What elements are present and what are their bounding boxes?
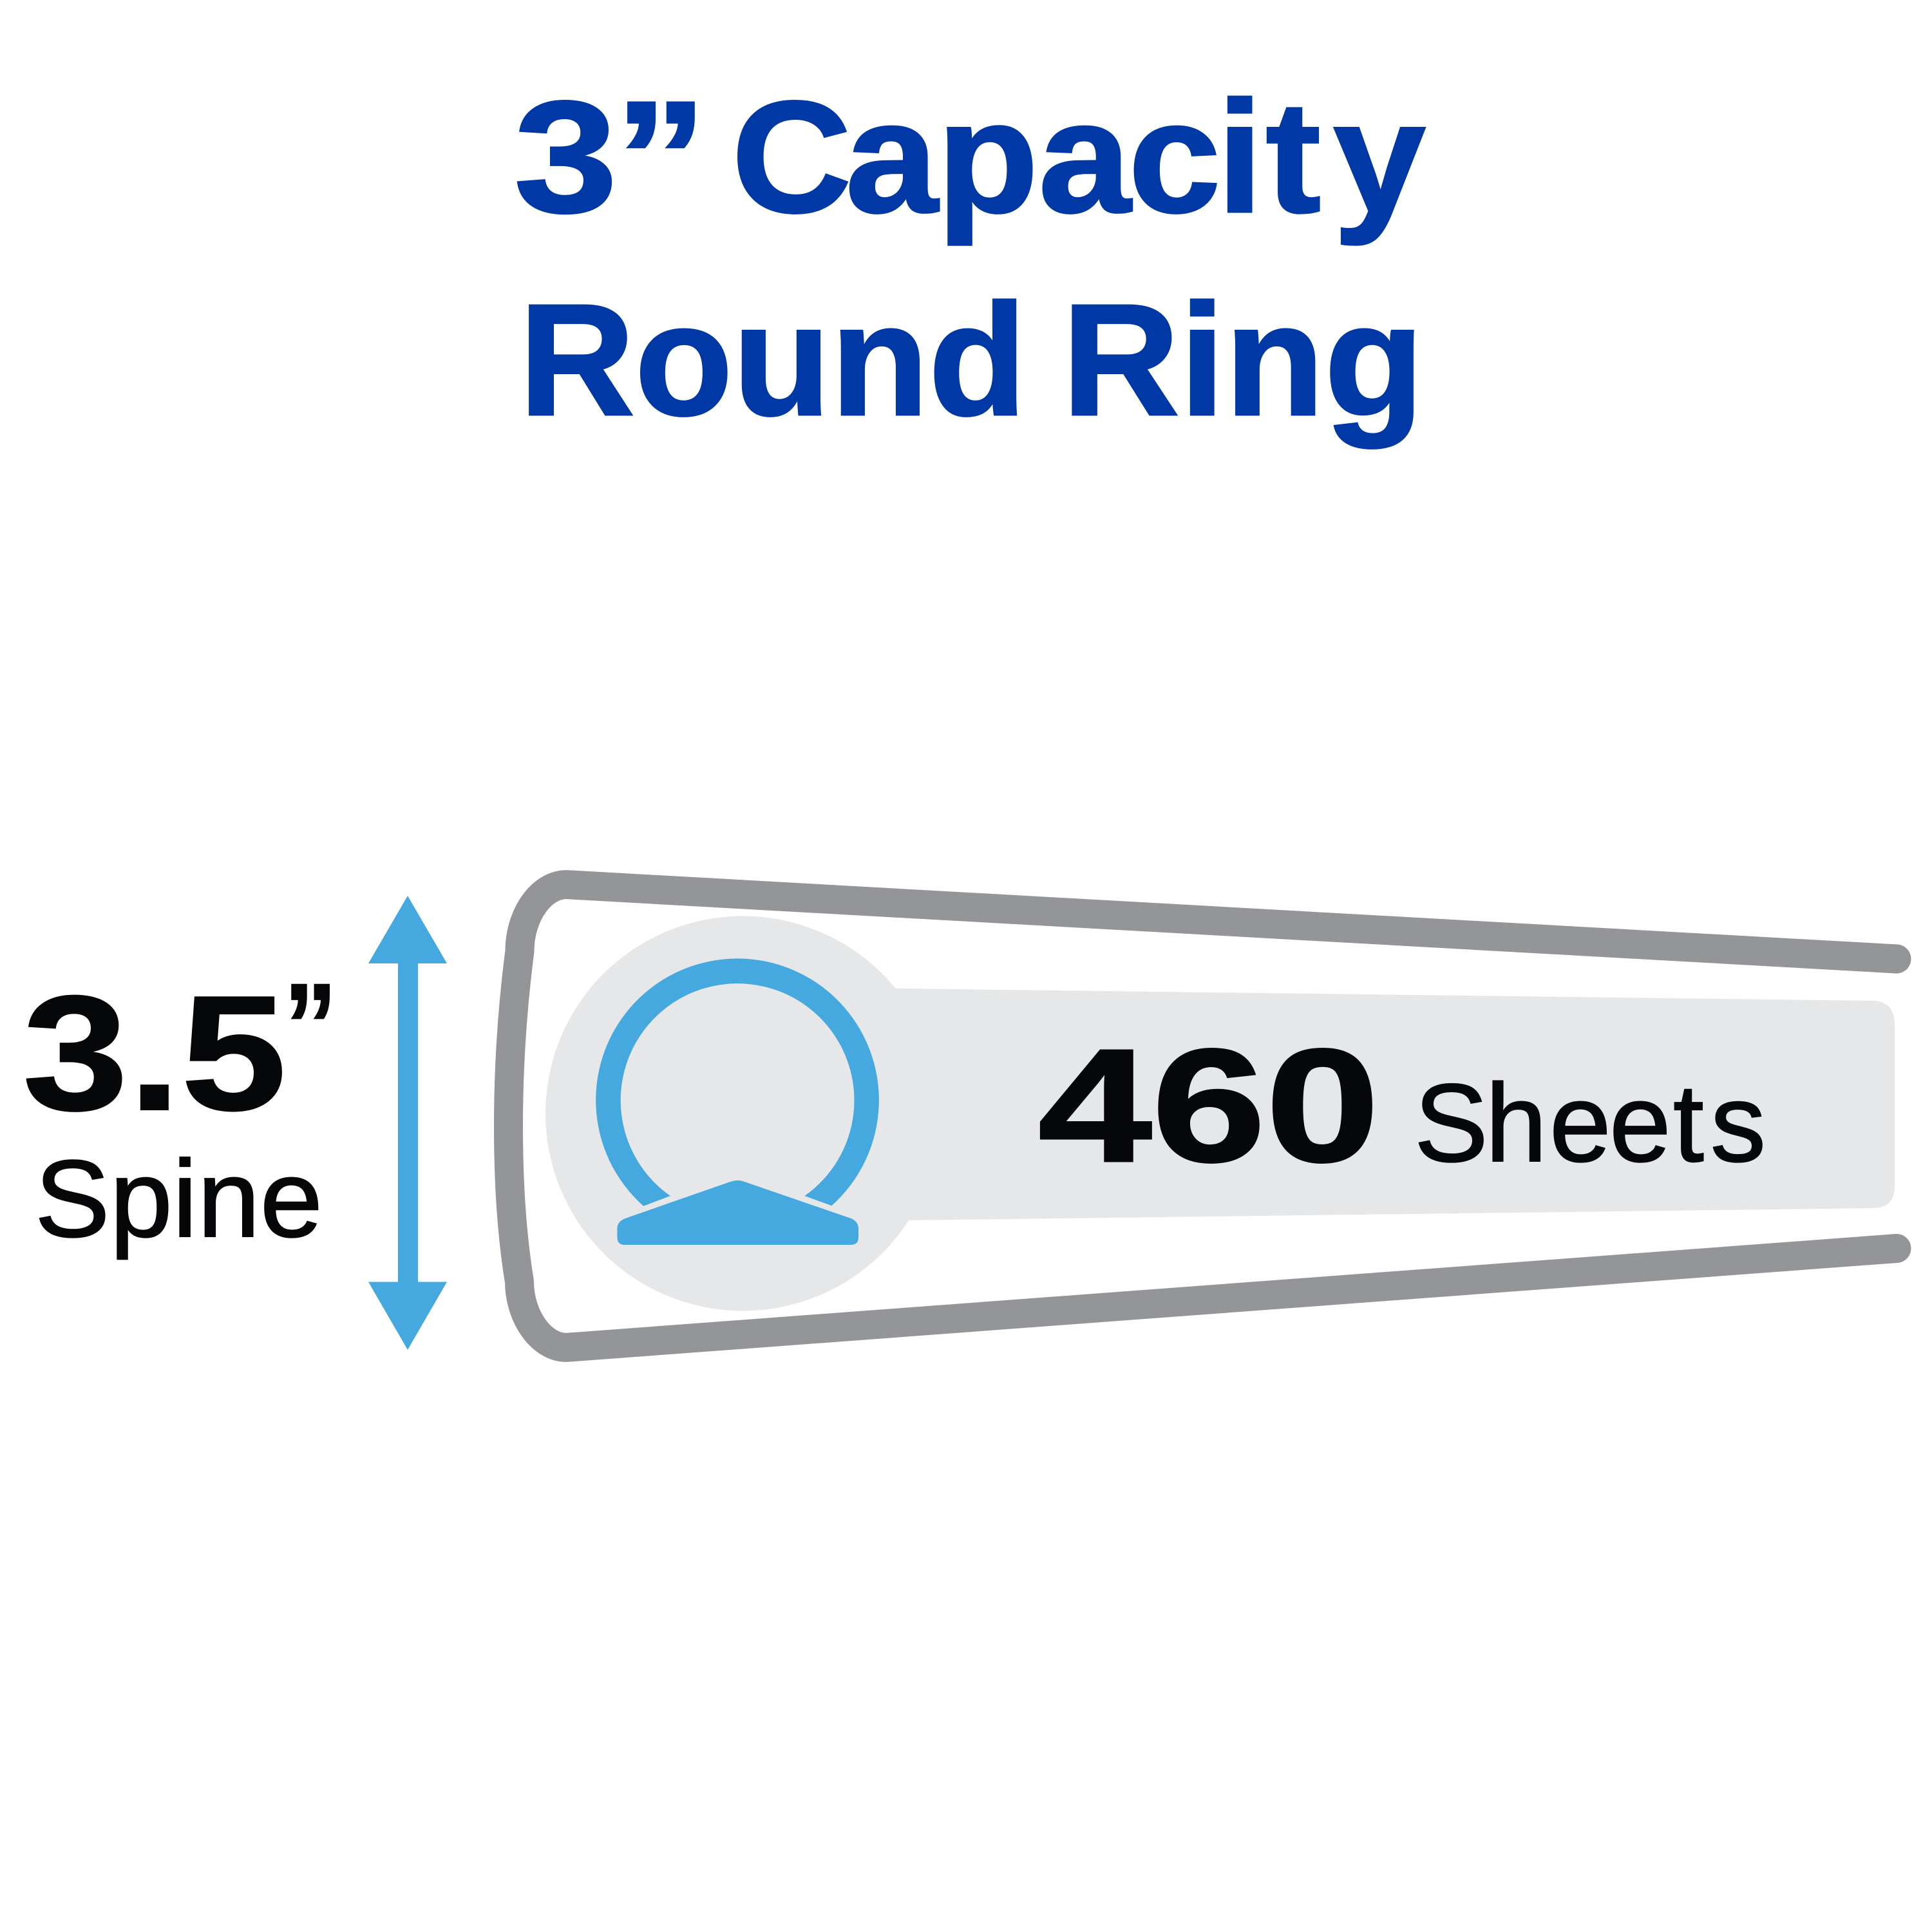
capacity label: 460 Sheets bbox=[1038, 1016, 1766, 1195]
icon: round binder ring with base bbox=[596, 958, 879, 1245]
capacity label: 460 Sheets: 460 bbox=[1038, 1016, 1379, 1195]
title: 3” Capacity Round Ring bbox=[514, 68, 1426, 449]
spine measurement label: 3.5” Spine: ” bbox=[283, 958, 337, 1095]
spine measurement label: 3.5” Spine: 3.5 bbox=[23, 961, 287, 1144]
spine measurement label: 3.5” Spine: Spine bbox=[35, 1138, 323, 1260]
sheet capacity band bbox=[889, 989, 1895, 1220]
title: 3” Capacity Round Ring: Capacity bbox=[732, 68, 1426, 246]
title: 3” Capacity Round Ring: 3” bbox=[514, 68, 708, 245]
capacity label: 460 Sheets: Sheets bbox=[1414, 1061, 1766, 1185]
ring base bbox=[617, 1180, 858, 1245]
arrow: double-headed spine height bbox=[368, 896, 447, 1350]
spine measurement label: 3.5” Spine bbox=[23, 958, 337, 1260]
title: 3” Capacity Round Ring: Ring bbox=[1062, 271, 1424, 449]
binder cover outline bbox=[509, 885, 1897, 1347]
title: 3” Capacity Round Ring: Round bbox=[519, 271, 1027, 449]
ring arc bbox=[596, 958, 879, 1206]
ring background circle bbox=[545, 916, 940, 1311]
